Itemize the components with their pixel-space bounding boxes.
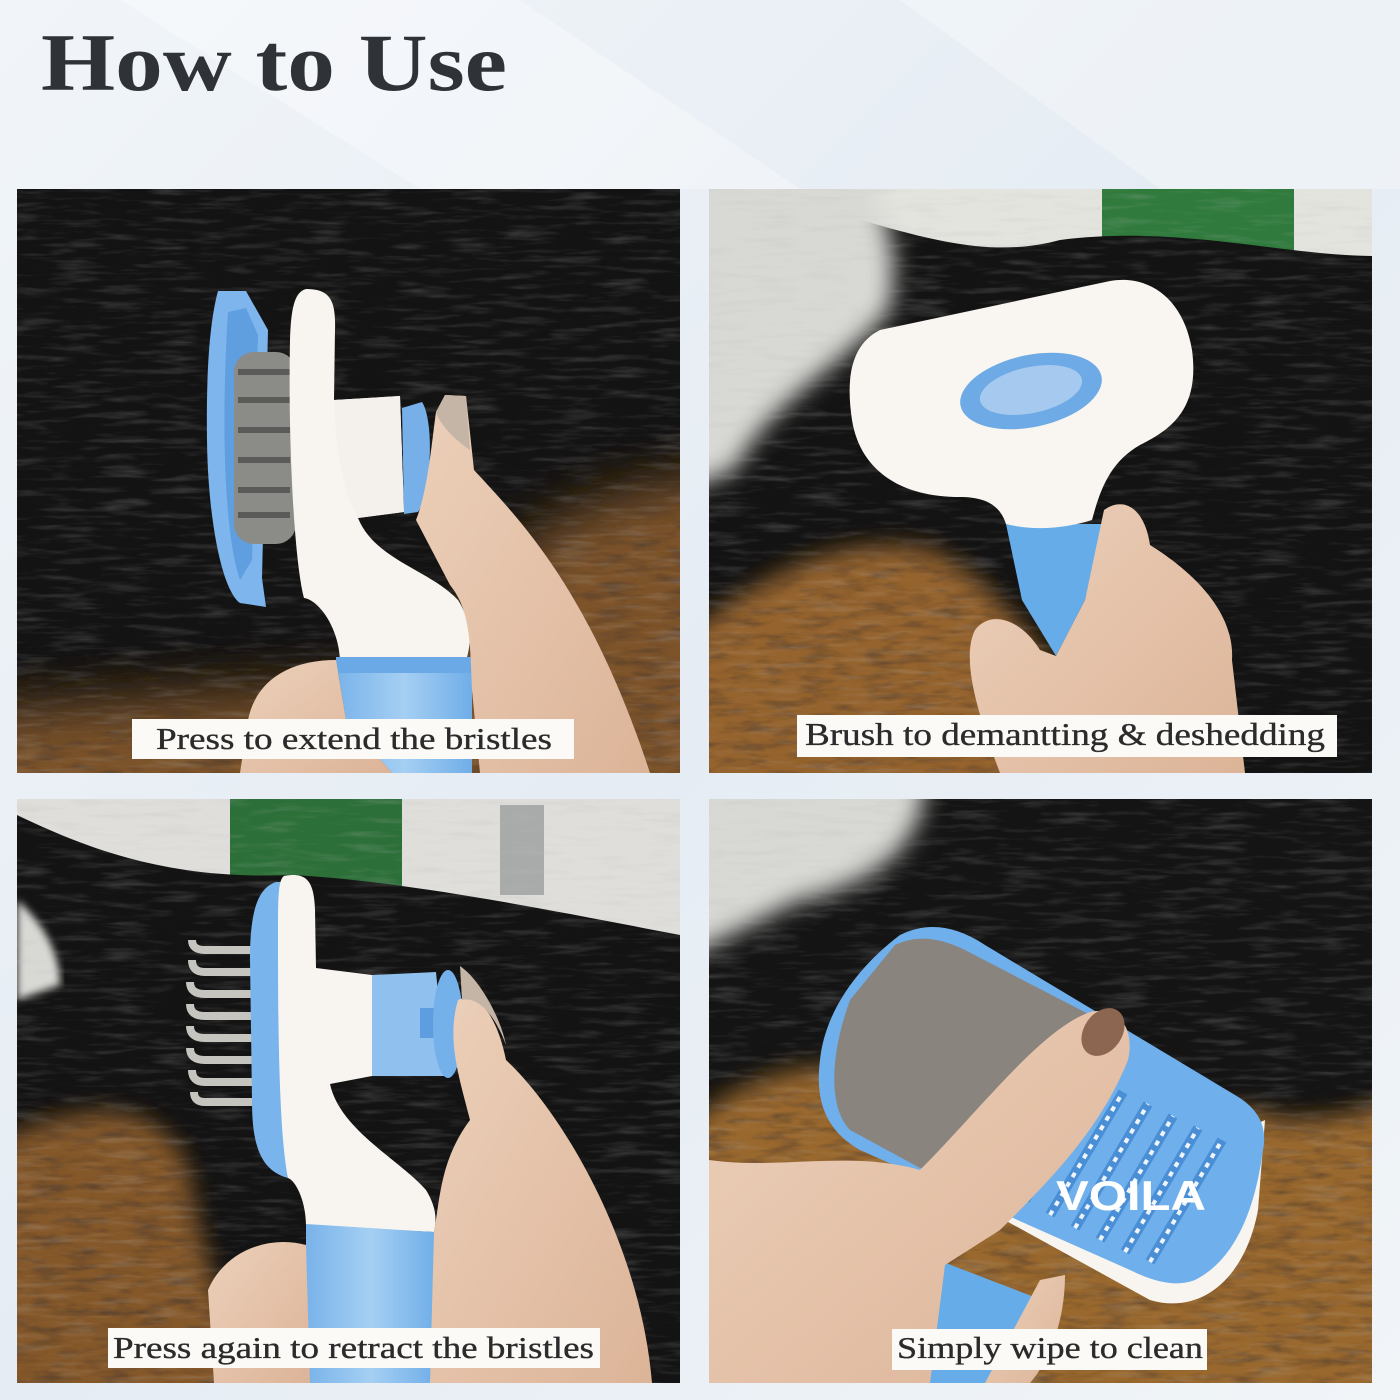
photo: dog fur: [709, 799, 1372, 1383]
photo: dog fur and background: [709, 189, 1372, 773]
icon: hand: [208, 966, 652, 1383]
panel: simply wipe to clean: [709, 799, 1372, 1383]
title: How to Use: [41, 17, 507, 108]
caption: Press again to retract the bristles: [113, 1330, 594, 1365]
photo: dog fur: [17, 189, 680, 773]
caption: Press to extend the bristles: [156, 721, 552, 756]
icon: hand: [240, 395, 650, 773]
photo: dog fur and background: [0, 799, 680, 1400]
caption: Brush to demantting & deshedding: [805, 716, 1325, 752]
caption: Simply wipe to clean: [897, 1330, 1204, 1365]
panel: press to extend the bristles: [17, 189, 680, 773]
panel: press again to retract the bristles: [0, 799, 680, 1400]
icon: brush with collected hair: [819, 927, 1265, 1383]
caption: [132, 719, 574, 759]
brand logo: VOILA: [1056, 1172, 1206, 1219]
icon: hand with finger: [709, 1000, 1133, 1383]
icon: hand: [970, 504, 1245, 773]
icon: brush side view with blue plate: [207, 289, 472, 773]
icon: brush top view: [850, 280, 1193, 656]
icon: brush side view retracted: [190, 875, 463, 1383]
panel: brush to dematting and deshedding: [709, 189, 1372, 773]
